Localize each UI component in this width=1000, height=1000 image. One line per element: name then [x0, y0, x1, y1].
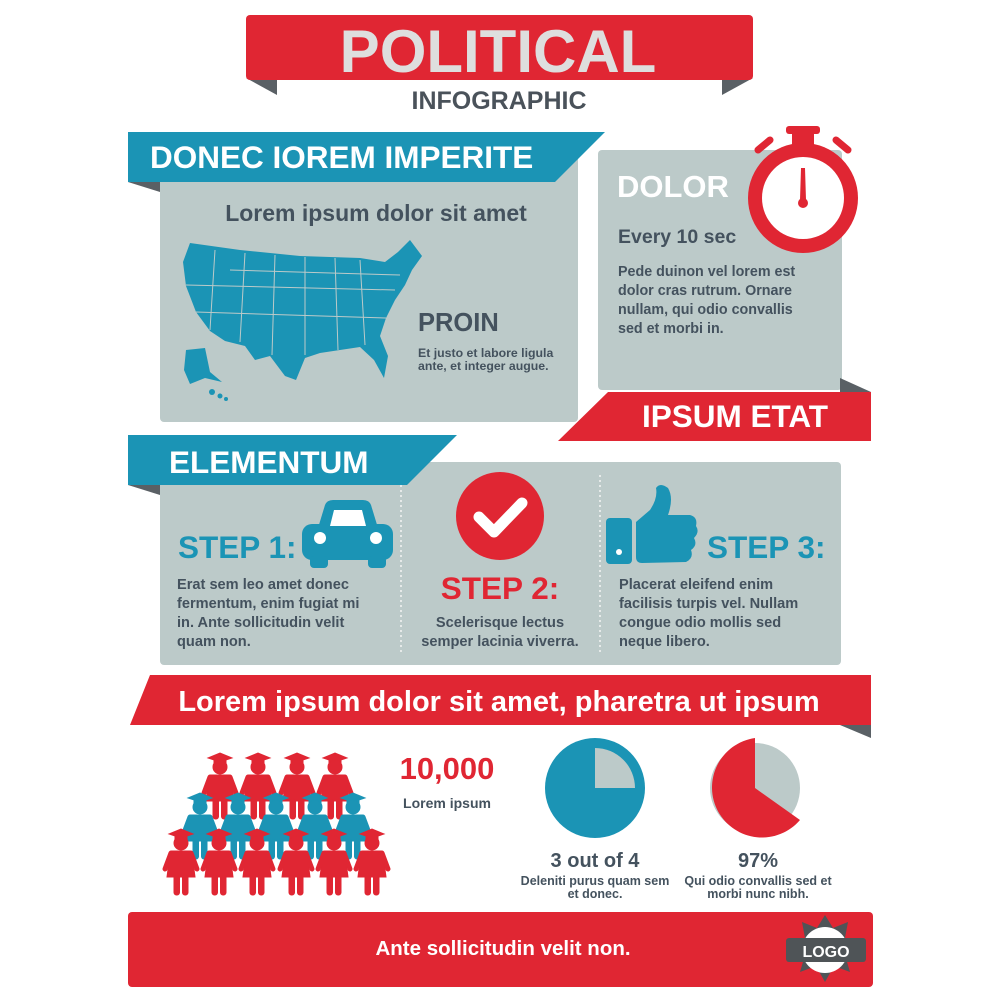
- step 2: STEP 2:: [441, 570, 559, 606]
- panel: dolor: sed et morbi in.: [618, 321, 724, 337]
- ribbon: ipsum etat: [558, 378, 871, 441]
- icon: thumbs up: [606, 485, 698, 564]
- panel: dolor: [598, 126, 858, 390]
- pie chart: 97%: [684, 738, 832, 901]
- subtitle: INFOGRAPHIC: [412, 87, 586, 115]
- step 1: STEP 1:: [178, 529, 296, 565]
- panel: dolor: nullam, qui odio convallis: [618, 302, 793, 318]
- map heading: Lorem ipsum dolor sit amet: [225, 200, 527, 226]
- pie chart: 3 out of 4: [521, 738, 669, 901]
- icon: stopwatch: [748, 126, 858, 253]
- panel: map: [128, 132, 605, 422]
- step 2: semper lacinia viverra.: [421, 634, 579, 650]
- title banner: [246, 15, 753, 95]
- step 3: Placerat eleifend enim: [619, 577, 773, 593]
- pie chart: 3 out of 4: Deleniti purus quam sem: [521, 874, 669, 888]
- icon: car: [302, 500, 393, 568]
- ribbon: ipsum etat: IPSUM ETAT: [642, 398, 828, 434]
- ribbon: donec: [128, 132, 605, 192]
- pie chart: 97%: morbi nunc nibh.: [707, 887, 809, 901]
- panel: map: ante, et integer augue.: [418, 359, 549, 373]
- step 2: Scelerisque lectus: [436, 615, 564, 631]
- step 3: STEP 3:: [707, 529, 825, 565]
- step 1: quam non.: [177, 634, 251, 650]
- footer: Ante sollicitudin velit non.: [375, 937, 631, 960]
- ribbon: donec: DONEC IOREM IMPERITE: [150, 139, 533, 175]
- step 1: Erat sem leo amet donec: [177, 577, 349, 593]
- ribbon: elementum: [128, 435, 457, 495]
- proin: PROIN: [418, 309, 499, 337]
- footer: [128, 912, 873, 987]
- step 3: congue odio mollis sed: [619, 615, 781, 631]
- title text: POLITICAL: [340, 18, 656, 85]
- step 3: facilisis turpis vel. Nullam: [619, 596, 798, 612]
- pie chart: 97%: Qui odio convallis sed et: [684, 874, 832, 888]
- panel: map: Et justo et labore ligula: [418, 346, 553, 360]
- panel: dolor: Pede duinon vel lorem est: [618, 264, 795, 280]
- step 1: in. Ante sollicitudin velit: [177, 615, 344, 631]
- panel: dolor: dolor cras rutrum. Ornare: [618, 283, 792, 299]
- stat: 10,000: 10,000: [400, 751, 494, 786]
- people chart: [165, 753, 388, 895]
- map of USA: [183, 240, 422, 401]
- step 3: neque libero.: [619, 634, 710, 650]
- stat: 10,000: [400, 751, 494, 811]
- panel: dolor: Every 10 sec: [618, 226, 736, 248]
- panel: dolor: DOLOR: [617, 169, 729, 204]
- step 2: [421, 472, 579, 650]
- step 3: [606, 485, 825, 650]
- logo: [786, 915, 866, 982]
- ribbon: elementum: ELEMENTUM: [169, 444, 368, 480]
- stat: 10,000: Lorem ipsum: [403, 795, 491, 811]
- pie chart: 3 out of 4: et donec.: [568, 887, 622, 901]
- ribbon: lorem ipsum heading: Lorem ipsum dolor sit amet, pharetra ut ipsum: [178, 686, 820, 718]
- pie chart: 3 out of 4: 3 out of 4: [551, 850, 640, 872]
- step 1: [177, 500, 393, 650]
- logo: LOGO: [802, 944, 850, 961]
- panel: steps: [128, 435, 841, 665]
- step 1: fermentum, enim fugiat mi: [177, 596, 359, 612]
- icon: check: [456, 472, 544, 560]
- ribbon: lorem ipsum heading: [130, 675, 871, 738]
- pie chart: 97%: 97%: [738, 850, 778, 872]
